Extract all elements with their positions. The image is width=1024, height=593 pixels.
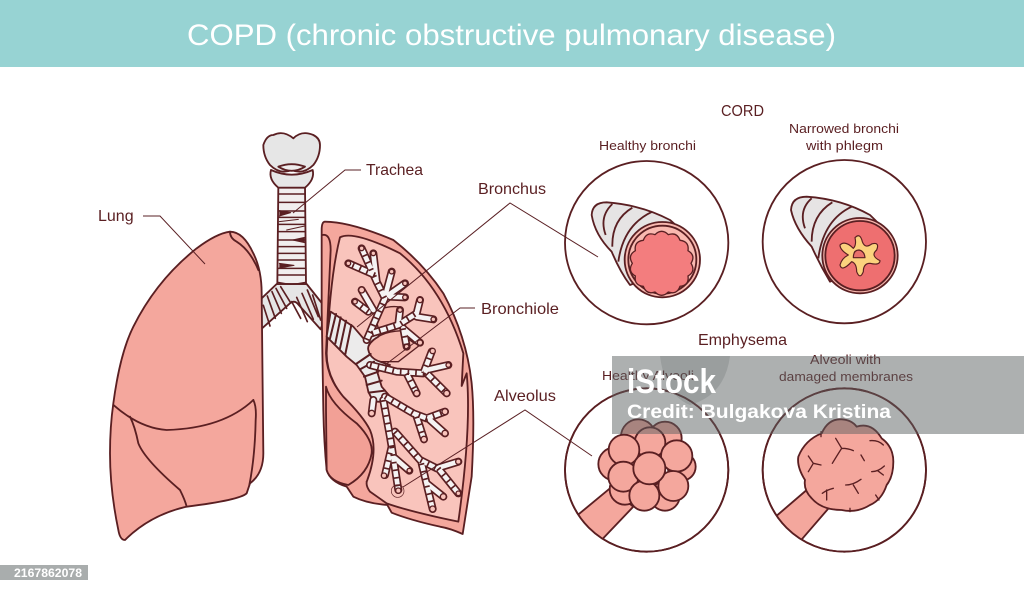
circle: alveoli with damaged membranes	[763, 388, 926, 552]
label: Healthy Alveoli: Healthy Alveoli	[602, 368, 694, 383]
right lung cross-section	[322, 222, 473, 534]
alveolus marker	[391, 485, 404, 497]
outer pleura	[322, 222, 473, 534]
inner lobes	[368, 307, 420, 362]
leader lines: Bronchus	[357, 203, 598, 327]
label: Alveolus: Alveolus	[494, 388, 556, 405]
label: Alveoli with damaged membranes: damaged membranes	[779, 369, 914, 384]
watermark band	[612, 356, 1024, 434]
upper left pleura fold	[322, 235, 377, 482]
circle: narrowed bronchi with phlegm	[763, 160, 926, 323]
trachea and main bronchi	[261, 133, 327, 329]
bronchiole tips	[346, 246, 461, 512]
title: COPD (chronic obstructive pulmonary disease)	[187, 19, 836, 52]
inner lung tissue	[327, 236, 468, 522]
phlegm	[840, 236, 880, 276]
leader line: Bronchiole	[385, 308, 475, 365]
watermark: iStock: iStock	[627, 363, 716, 401]
image id tag: 2167862078	[14, 568, 83, 580]
label: Trachea: Trachea	[366, 162, 423, 179]
membrane cracks	[808, 432, 884, 512]
bronchial tree	[348, 248, 458, 509]
header banner	[0, 0, 1024, 67]
image id tag	[0, 565, 88, 580]
label: Lung: Lung	[98, 208, 134, 225]
heading: CORD: CORD	[721, 103, 764, 120]
lower left lobe	[326, 387, 372, 485]
leader lines: Alveolus	[403, 410, 592, 487]
circle: healthy alveoli	[565, 388, 728, 552]
bronchial trunk	[327, 312, 392, 402]
label: Narrowed bronchi with phlegm: with phlegm	[805, 138, 883, 153]
leader line: Lung	[143, 216, 205, 264]
left lung	[110, 232, 263, 540]
watermark: credit: Credit: Bulgakova Kristina	[627, 402, 891, 423]
trunk cartilage rings	[330, 314, 385, 393]
label: Bronchiole: Bronchiole	[481, 301, 559, 318]
label: Narrowed bronchi with phlegm: Narrowed bronchi	[789, 121, 899, 136]
leader line: Trachea	[293, 170, 361, 213]
heading: Emphysema: Emphysema	[698, 332, 787, 349]
label: Healthy bronchi: Healthy bronchi	[599, 138, 696, 153]
label: Bronchus: Bronchus	[478, 181, 546, 198]
label: Alveoli with damaged membranes: Alveoli with	[810, 352, 881, 367]
circle: healthy bronchi	[565, 161, 728, 324]
